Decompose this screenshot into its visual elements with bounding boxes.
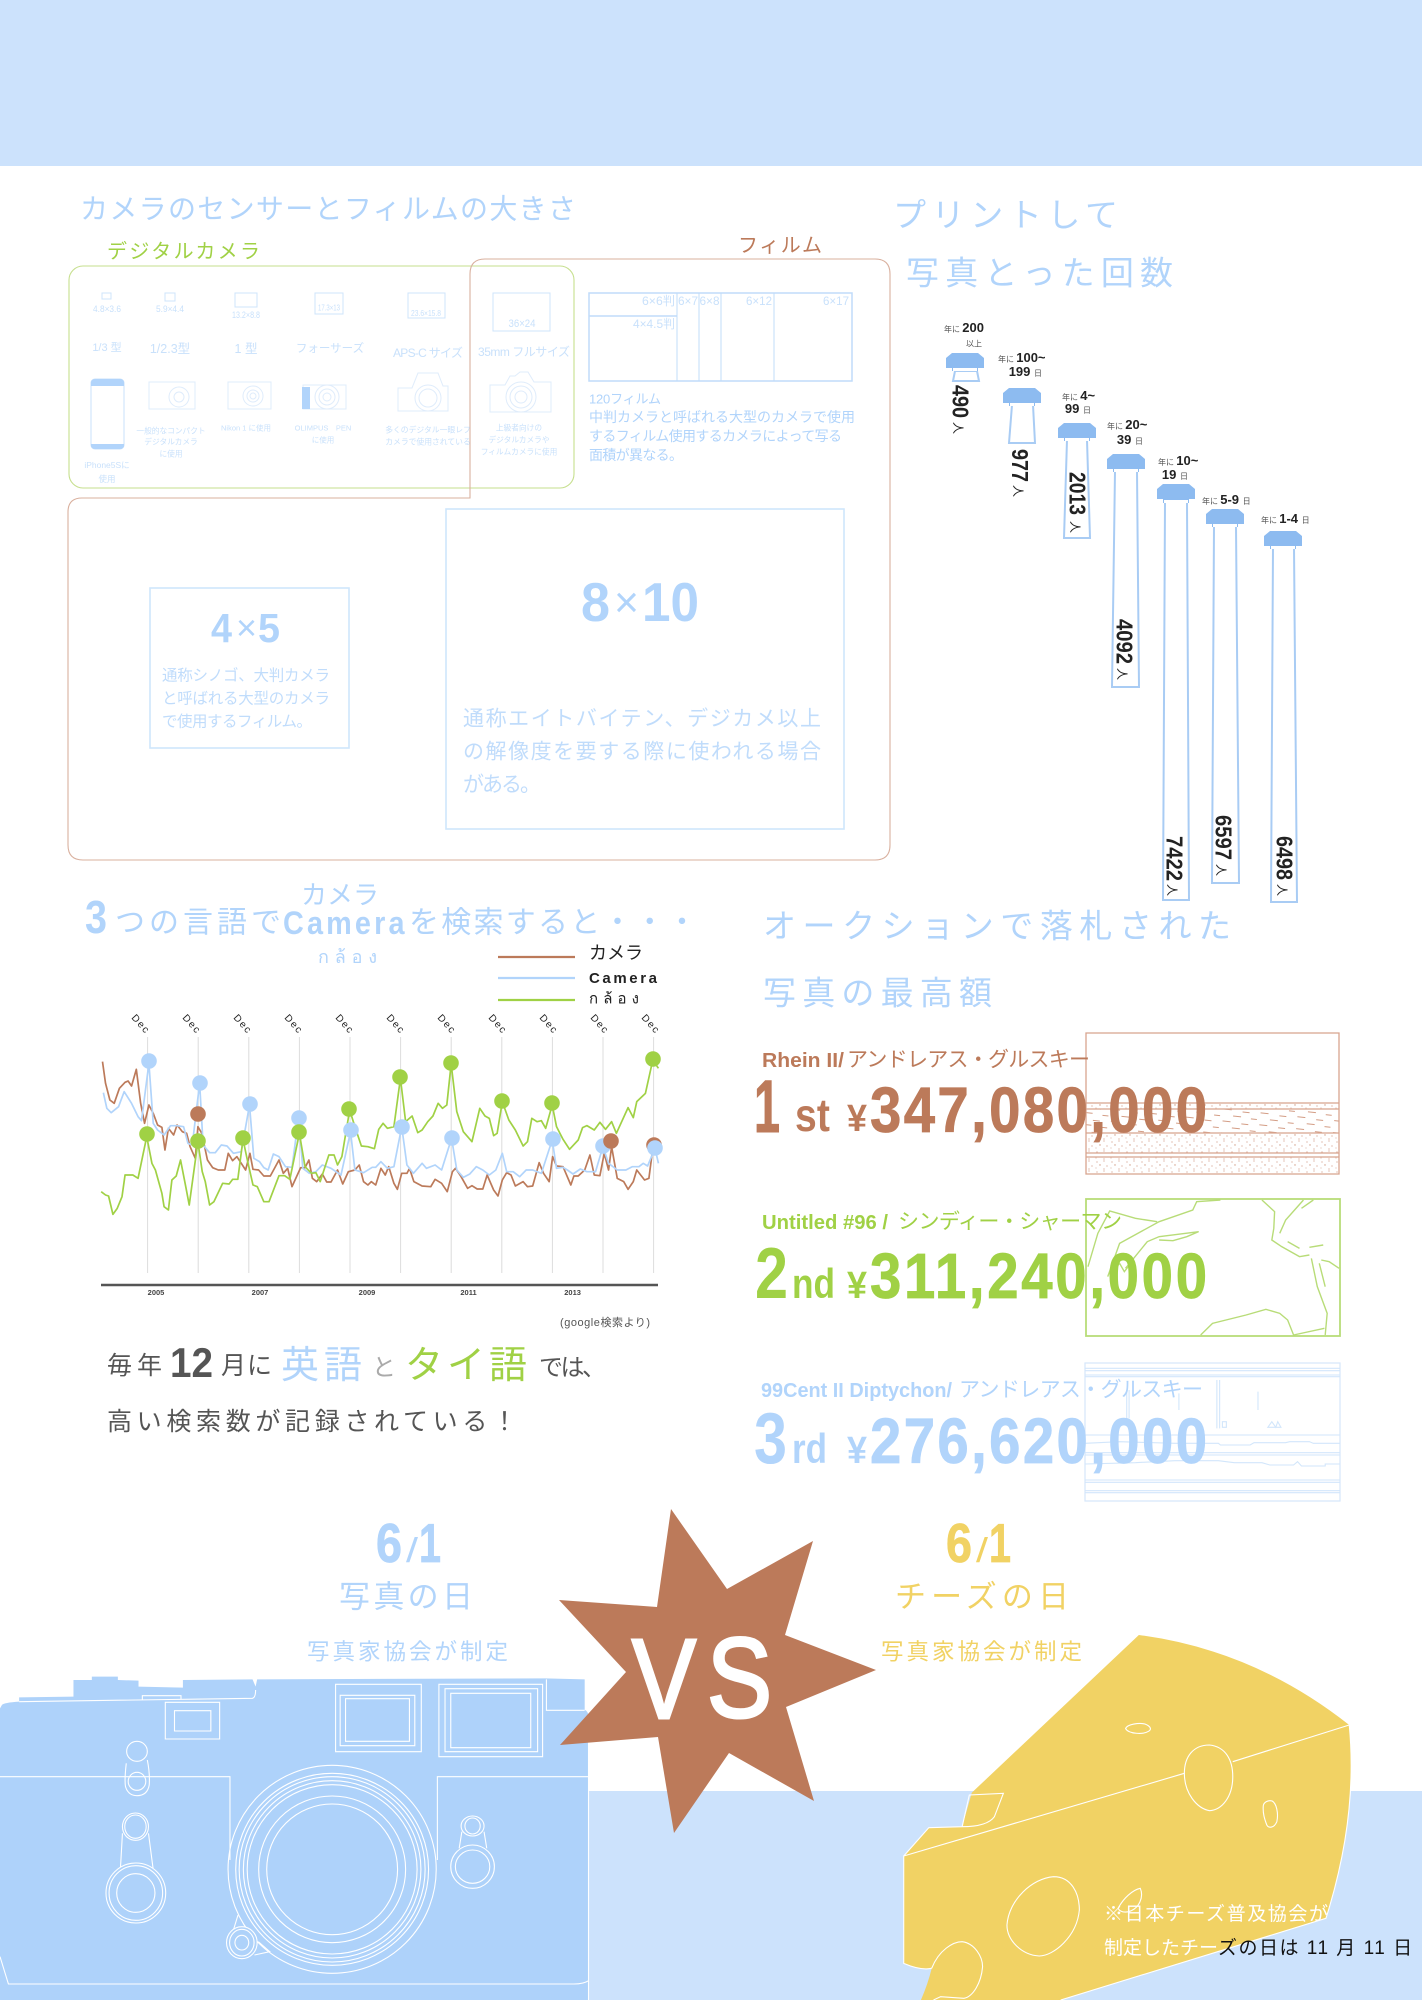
sensor: 1 type: 1 型 — [235, 342, 257, 356]
text: conclusion — [107, 1339, 606, 1436]
line chart: search volume 2004 to 2014: Dec — [537, 1013, 560, 1037]
text: 120 film description: 中判カメラと呼ばれる大型のカメラで使用 — [589, 409, 855, 425]
auction rank 2: nd — [792, 1260, 835, 1307]
heading: search in three languages: Camera — [283, 906, 406, 941]
film canister: 40-99 days: 99 日 — [1065, 401, 1091, 416]
icon: compact camera: に使用 — [159, 448, 183, 458]
film canister: 10-19 days: 人 — [1165, 884, 1179, 896]
box: 4x5 film: × — [236, 607, 257, 648]
heading: search in three languages: カメラ — [301, 880, 379, 910]
icon: Olympus PEN camera: に使用 — [312, 434, 334, 444]
icon: Olympus PEN camera — [295, 385, 351, 444]
box: 8x10 film: の解像度を要する際に使われる場合 — [463, 740, 821, 764]
line chart: search volume 2004 to 2014: Dec — [486, 1013, 509, 1037]
panel: sensor and film sizes — [68, 194, 890, 860]
diagram: 120 film sizes: 6×7 — [678, 294, 698, 308]
heading: photo day: 写真の日 — [339, 1580, 473, 1614]
auction rank 2: 2 — [755, 1234, 788, 1314]
artwork outline: Untitled #96 — [1086, 1199, 1340, 1336]
film canister: 40-99 days: 年に 4~ — [1062, 388, 1095, 403]
auction rank 3 — [754, 1378, 1207, 1479]
note: Japan cheese association — [1104, 1903, 1414, 1959]
auction rank 3: 276,620,000 — [870, 1405, 1207, 1477]
line chart: search volume 2004 to 2014: Dec — [588, 1013, 611, 1037]
sensor: APS-C — [393, 293, 463, 360]
auction rank 1: ¥ — [847, 1098, 867, 1140]
heading: search in three languages: 3 — [85, 891, 107, 943]
film canister: 10-19 days: 年に 10~ — [1158, 453, 1199, 468]
line chart: search volume 2004 to 2014: 2009 — [359, 1288, 375, 1297]
diagram: 120 film sizes: 6×6判 — [642, 294, 675, 308]
film canister: 40-99 days — [1058, 388, 1096, 538]
heading: number of prints — [893, 196, 1173, 292]
icon: compact camera — [136, 382, 206, 458]
film canister: over 200 days: 人 — [951, 422, 965, 434]
panel: searching camera in three languages — [85, 880, 697, 1436]
sensor: four thirds — [296, 293, 364, 355]
icon: compact camera: 一般的なコンパクト — [136, 426, 206, 436]
line chart: search volume 2004 to 2014: 2011 — [460, 1288, 477, 1297]
diagram: 120 film sizes: 6×17 — [823, 294, 849, 308]
diagram: 120 film sizes: 6×8 — [700, 294, 720, 308]
sensor: 35mm full size: 35mm フルサイズ — [478, 344, 570, 359]
heading: sensor and film sizes: カメラのセンサーとフィルムの大きさ — [80, 194, 576, 224]
line chart: search volume 2004 to 2014: Dec — [333, 1013, 356, 1037]
box: 4x5 film: 5 — [258, 605, 280, 651]
line chart: search volume 2004 to 2014: Dec — [129, 1013, 152, 1037]
auction rank 1: 1 — [754, 1065, 780, 1148]
sensor: 35mm full size: 36×24 — [508, 318, 536, 330]
frame: digital cameras — [69, 266, 574, 488]
line chart: search volume 2004 to 2014: Dec — [639, 1013, 662, 1037]
film canister: 100-199 days: 977 — [1007, 449, 1033, 482]
film canister: 20-39 days: 人 — [1115, 668, 1129, 680]
sensor: APS-C: APS-C サイズ — [393, 345, 463, 360]
heading: cheese day: チーズの日 — [895, 1580, 1069, 1614]
note: Japan cheese association: ※日本チーズ普及協会が — [1104, 1903, 1328, 1925]
auction rank 3: rd — [792, 1425, 827, 1472]
film canister: 1-4 days — [1261, 511, 1310, 902]
text: conclusion: 英語 — [281, 1345, 362, 1387]
auction rank 1: 347,080,000 — [870, 1074, 1207, 1146]
sensor: 1/3 type — [92, 293, 122, 354]
icon: SLR camera: 多くのデジタル一眼レフ — [385, 424, 471, 434]
source note: (google検索より) — [560, 1315, 650, 1329]
note: photo day origin: 写真家協会が制定 — [307, 1640, 508, 1664]
film canister: 20-39 days — [1107, 417, 1148, 687]
line chart: search volume 2004 to 2014: Dec — [231, 1013, 254, 1037]
box: 8x10 film: がある。 — [463, 774, 541, 796]
sensor: four thirds: 17.3×13 — [318, 304, 340, 312]
heading: search in three languages: กล้อง — [318, 947, 377, 967]
auction rank 1 — [754, 1048, 1207, 1148]
diagram: 120 film sizes — [589, 293, 852, 381]
panel: number of prints — [893, 196, 1310, 902]
icon: versus starburst: V — [632, 1616, 696, 1742]
panel: highest auction prices — [754, 908, 1340, 1501]
film canister: 1-4 days: 人 — [1275, 884, 1289, 896]
line chart: search volume 2004 to 2014: 2005 — [148, 1288, 164, 1297]
film canister: over 200 days — [944, 320, 984, 434]
text: conclusion: 月に — [221, 1352, 272, 1380]
auction rank 1: Rhein II/ — [762, 1050, 844, 1072]
icon: SLR camera — [385, 373, 471, 446]
icon: Olympus PEN camera: OLIMPUS PEN — [295, 424, 351, 432]
film canister: 40-99 days: 2013 — [1064, 472, 1090, 515]
panel: cheese day — [881, 1512, 1414, 2000]
heading: highest auction prices: オークションで落札された — [763, 908, 1231, 944]
icon: SLR camera: カメラで使用されている — [385, 436, 471, 446]
film canister: 1-4 days: 年に 1-4 日 — [1261, 511, 1310, 526]
icon: versus starburst: S — [707, 1615, 772, 1741]
text: 120 film description: 120フィルム — [589, 392, 661, 406]
sensor: 1/3 type: 4.8×3.6 — [93, 304, 121, 314]
icon: full frame camera: 上級者向けの — [496, 422, 542, 432]
line chart: search volume 2004 to 2014 — [101, 1013, 663, 1297]
note: cheese day origin: 写真家協会が制定 — [881, 1640, 1082, 1664]
heading: search in three languages: つの言語で — [115, 906, 281, 940]
top colour band — [0, 0, 1422, 166]
film canister: 1-4 days: 6498 — [1272, 836, 1298, 880]
line chart: search volume 2004 to 2014: Dec — [435, 1013, 458, 1037]
date: cheese day: 1 — [989, 1512, 1011, 1574]
chart legend: Camera — [589, 970, 658, 987]
box: 8x10 film — [446, 509, 844, 829]
film canister: over 200 days: 年に 200 — [944, 320, 984, 335]
heading: search in three languages: を検索すると・・・ — [409, 906, 697, 940]
date: cheese day: 6 — [946, 1512, 972, 1574]
icon: full frame camera: フィルムカメラに使用 — [481, 446, 557, 456]
icon: smartphone: iPhone5Sに — [84, 460, 130, 470]
auction rank 2: Untitled #96 / — [762, 1212, 888, 1234]
film canister: 10-19 days — [1157, 453, 1199, 900]
sensor: 1/2.3 type: 1/2.3型 — [150, 342, 190, 356]
film canister: 5-9 days: 6597 — [1210, 815, 1236, 860]
sensor: four thirds: フォーサーズ — [296, 341, 364, 355]
text: conclusion: タイ語 — [405, 1345, 527, 1387]
line chart: search volume 2004 to 2014: 2013 — [564, 1288, 581, 1297]
sensor: 1 type: 13.2×8.8 — [232, 310, 260, 320]
chart legend: กล้อง — [589, 990, 639, 1008]
film canister: over 200 days: 以上 — [966, 340, 982, 348]
film canister: 5-9 days: 年に 5-9 日 — [1202, 492, 1251, 507]
box: 8x10 film: × — [614, 578, 639, 627]
film canister: 20-39 days: 39 日 — [1117, 432, 1143, 447]
heading: number of prints: 写真とった回数 — [906, 254, 1173, 292]
text: 120 film description: 面積が異なる。 — [589, 447, 683, 463]
film canister: over 200 days: 490 — [948, 385, 974, 418]
text: 120 film description: するフィルム使用するカメラによって写る — [589, 428, 842, 444]
icon: Nikon 1 camera — [221, 382, 271, 432]
heading: digital cameras: デジタルカメラ — [107, 240, 260, 263]
auction rank 3: 99Cent II Diptychon/ — [761, 1380, 952, 1402]
date: photo day — [376, 1512, 441, 1574]
auction rank 3: ¥ — [847, 1430, 867, 1472]
sensor: APS-C: 23.6×15.8 — [411, 308, 441, 318]
frame: film — [68, 259, 890, 860]
illustration: cheese wedge — [904, 1635, 1351, 2000]
text: conclusion: と — [372, 1354, 396, 1382]
auction rank 2 — [755, 1210, 1207, 1314]
text: conclusion: では、 — [539, 1354, 606, 1382]
text: 120 film description — [589, 392, 855, 463]
sensor: 1 type — [232, 293, 260, 356]
box: 4x5 film: 通称シノゴ、大判カメラ — [162, 666, 330, 684]
heading: film: フィルム — [738, 235, 822, 257]
box: 8x10 film: 10 — [642, 571, 699, 633]
note: Japan cheese association: 制定したチーズの日は 11 月 11 日 — [1104, 1937, 1414, 1959]
date: photo day: 6 — [376, 1512, 402, 1574]
film canister: 10-19 days: 7422 — [1162, 836, 1188, 881]
box: 8x10 film: 通称エイトバイテン、デジカメ以上 — [463, 708, 821, 730]
diagram: 120 film sizes: 6×12 — [746, 294, 772, 308]
date: photo day: / — [406, 1532, 419, 1570]
box: 4x5 film: で使用するフィルム。 — [162, 712, 312, 730]
line chart: search volume 2004 to 2014: Dec — [384, 1013, 407, 1037]
sensor: 1/2.3 type — [150, 293, 190, 356]
chart legend — [498, 943, 658, 1008]
sensor: 1/2.3 type: 5.9×4.4 — [156, 304, 184, 314]
heading: highest auction prices — [763, 908, 1231, 1012]
line chart: search volume 2004 to 2014: 2007 — [252, 1288, 268, 1297]
text: conclusion: 12 — [170, 1339, 213, 1386]
film canister: 100-199 days: 人 — [1011, 485, 1025, 497]
icon: Nikon 1 camera: Nikon 1 に使用 — [221, 422, 271, 432]
artwork outline: 99 Cent II Diptychon — [1085, 1363, 1340, 1501]
auction rank 2: 311,240,000 — [870, 1240, 1207, 1312]
icon: full frame camera — [481, 372, 557, 456]
film canister: 100-199 days: 年に 100~ — [998, 350, 1046, 365]
text: conclusion: 毎年 — [107, 1352, 162, 1380]
auction rank 3: 3 — [754, 1399, 787, 1479]
date: photo day: 1 — [419, 1512, 441, 1574]
film canister: 5-9 days — [1202, 492, 1251, 883]
auction rank 1: アンドレアス・グルスキー — [847, 1048, 1090, 1072]
auction rank 2: シンディー・シャーマン — [898, 1210, 1122, 1234]
chart legend: カメラ — [589, 943, 643, 963]
heading: number of prints: プリントして — [893, 196, 1118, 234]
icon: full frame camera: デジタルカメラや — [488, 434, 550, 444]
date: cheese day: / — [976, 1532, 989, 1570]
auction rank 3: アンドレアス・グルスキー — [959, 1378, 1203, 1402]
text: conclusion: 高い検索数が記録されている！ — [107, 1408, 517, 1436]
icon: compact camera: デジタルカメラ — [144, 436, 198, 446]
box: 8x10 film: 8 — [581, 571, 610, 633]
box: 4x5 film: と呼ばれる大型のカメラ — [162, 690, 330, 708]
panel: photo day — [0, 1512, 589, 2000]
film canister: 100-199 days — [998, 350, 1046, 497]
line chart: search volume 2004 to 2014: Dec — [180, 1013, 203, 1037]
sensor: 1/3 type: 1/3 型 — [92, 340, 122, 354]
auction rank 1: st — [795, 1090, 830, 1142]
film canister: 5-9 days: 人 — [1214, 864, 1228, 876]
auction rank 2: ¥ — [847, 1265, 867, 1307]
line chart: search volume 2004 to 2014: Dec — [282, 1013, 305, 1037]
heading: highest auction prices: 写真の最高額 — [763, 974, 992, 1012]
film canister: 100-199 days: 199 日 — [1009, 364, 1042, 379]
box: 4x5 film: 4 — [211, 605, 232, 651]
artwork outline: Rhein II — [1086, 1033, 1339, 1174]
sensor: 35mm full size — [478, 293, 570, 359]
film canister: 20-39 days: 年に 20~ — [1107, 417, 1148, 432]
film canister: 40-99 days: 人 — [1068, 521, 1082, 533]
illustration: rangefinder camera — [0, 1677, 589, 2000]
heading: search in three languages — [85, 880, 697, 967]
icon: smartphone — [84, 379, 130, 484]
bottom colour band — [589, 1791, 1422, 2000]
date: cheese day — [946, 1512, 1011, 1574]
diagram: 120 film sizes: 4×4.5判 — [633, 317, 675, 331]
box: 4x5 film — [150, 588, 349, 748]
icon: smartphone: 使用 — [98, 474, 116, 484]
film canister: 10-19 days: 19 日 — [1162, 467, 1188, 482]
film canister: 20-39 days: 4092 — [1112, 619, 1138, 664]
icon: versus starburst — [559, 1509, 876, 1833]
